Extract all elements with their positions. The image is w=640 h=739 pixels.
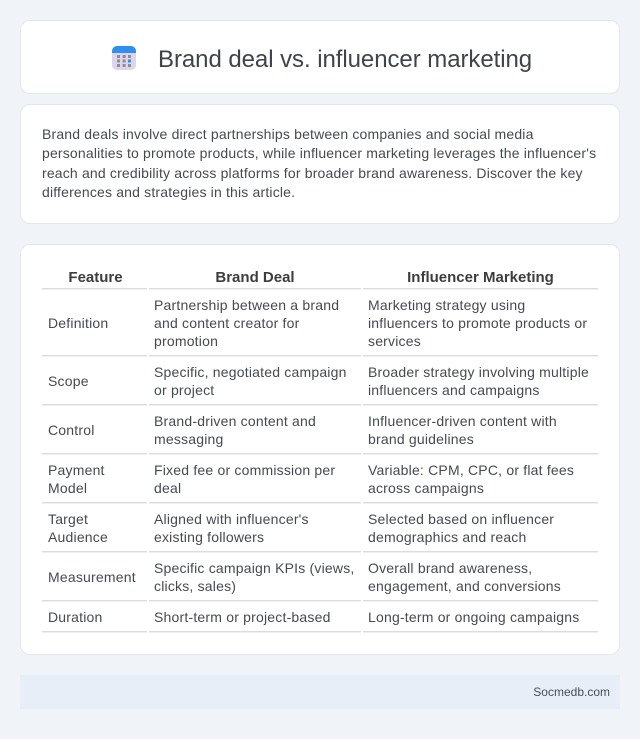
panel: intro text — [20, 104, 620, 224]
row: Payment Model: Variable: CPM, CPC, or flat fees — [368, 462, 574, 478]
row: Measurement: Specific campaign KPIs (views, — [154, 560, 355, 576]
row: Duration — [42, 609, 598, 633]
row: Control — [42, 413, 598, 455]
row: Payment Model — [42, 462, 598, 504]
panel: title card — [20, 20, 620, 94]
row: Payment Model: Model — [48, 480, 87, 496]
table header: Influencer Marketing — [407, 269, 554, 286]
row: Payment Model: Fixed fee or commission per — [154, 462, 335, 478]
row: Scope: Broader strategy involving multiple — [368, 364, 589, 380]
intro paragraph — [42, 126, 596, 200]
row: Target Audience: Selected based on influencer — [368, 511, 554, 527]
row: Definition: and content creator for — [154, 315, 299, 331]
row: Measurement: engagement, and conversions — [368, 578, 561, 594]
row: Control: Control — [48, 422, 95, 438]
row: Definition: influencers to promote products or — [368, 315, 587, 331]
panel: comparison table — [20, 244, 620, 655]
row: Control: Brand-driven content and — [154, 413, 316, 429]
comparison table — [42, 269, 598, 633]
row: Target Audience: existing followers — [154, 529, 264, 545]
intro paragraph: Brand deals involve direct partnerships between companies and social media — [42, 126, 534, 142]
row: Definition — [42, 297, 598, 357]
row: Scope — [42, 364, 598, 406]
row: Measurement — [42, 560, 598, 602]
row: Scope: Scope — [48, 373, 89, 389]
row: Target Audience: demographics and reach — [368, 529, 526, 545]
row: Target Audience: Aligned with influencer's — [154, 511, 309, 527]
icon: calendar — [112, 46, 136, 70]
row: Definition: promotion — [154, 333, 218, 349]
row: Control: Influencer-driven content with — [368, 413, 557, 429]
row: Scope: Specific, negotiated campaign — [154, 364, 347, 380]
row: Duration: Short-term or project-based — [154, 609, 331, 625]
row: Payment Model: deal — [154, 480, 181, 496]
row: Measurement: Measurement — [48, 569, 136, 585]
row: Control: messaging — [154, 431, 224, 447]
row: Definition: Marketing strategy using — [368, 297, 525, 313]
intro paragraph: reach and credibility across platforms for broader brand awareness. Discover the key — [42, 165, 583, 181]
intro paragraph: personalities to promote products, while influencer marketing leverages the influencer's — [42, 145, 596, 161]
title: Brand deal vs. influencer marketing — [158, 46, 532, 73]
table header: Feature — [68, 269, 123, 286]
row: Duration: Duration — [48, 609, 103, 625]
row: Target Audience — [42, 511, 598, 553]
table header: Brand Deal — [215, 269, 295, 286]
intro paragraph: differences and strategies in this article. — [42, 184, 295, 200]
row: Measurement: clicks, sales) — [154, 578, 236, 594]
row: Definition: Definition — [48, 315, 108, 331]
row: Definition: Partnership between a brand — [154, 297, 339, 313]
row: Target Audience: Target — [48, 511, 88, 527]
row: Duration: Long-term or ongoing campaigns — [368, 609, 579, 625]
row: Control: brand guidelines — [368, 431, 474, 447]
row: Payment Model: across campaigns — [368, 480, 484, 496]
footer source text: Socmedb.com — [533, 685, 610, 699]
table header — [42, 269, 598, 290]
row: Target Audience: Audience — [48, 529, 108, 545]
row: Definition: services — [368, 333, 421, 349]
row: Scope: influencers and campaigns — [368, 382, 540, 398]
row: Scope: or project — [154, 382, 214, 398]
panel: footer — [20, 675, 620, 709]
row: Payment Model: Payment — [48, 462, 105, 478]
row: Measurement: Overall brand awareness, — [368, 560, 532, 576]
